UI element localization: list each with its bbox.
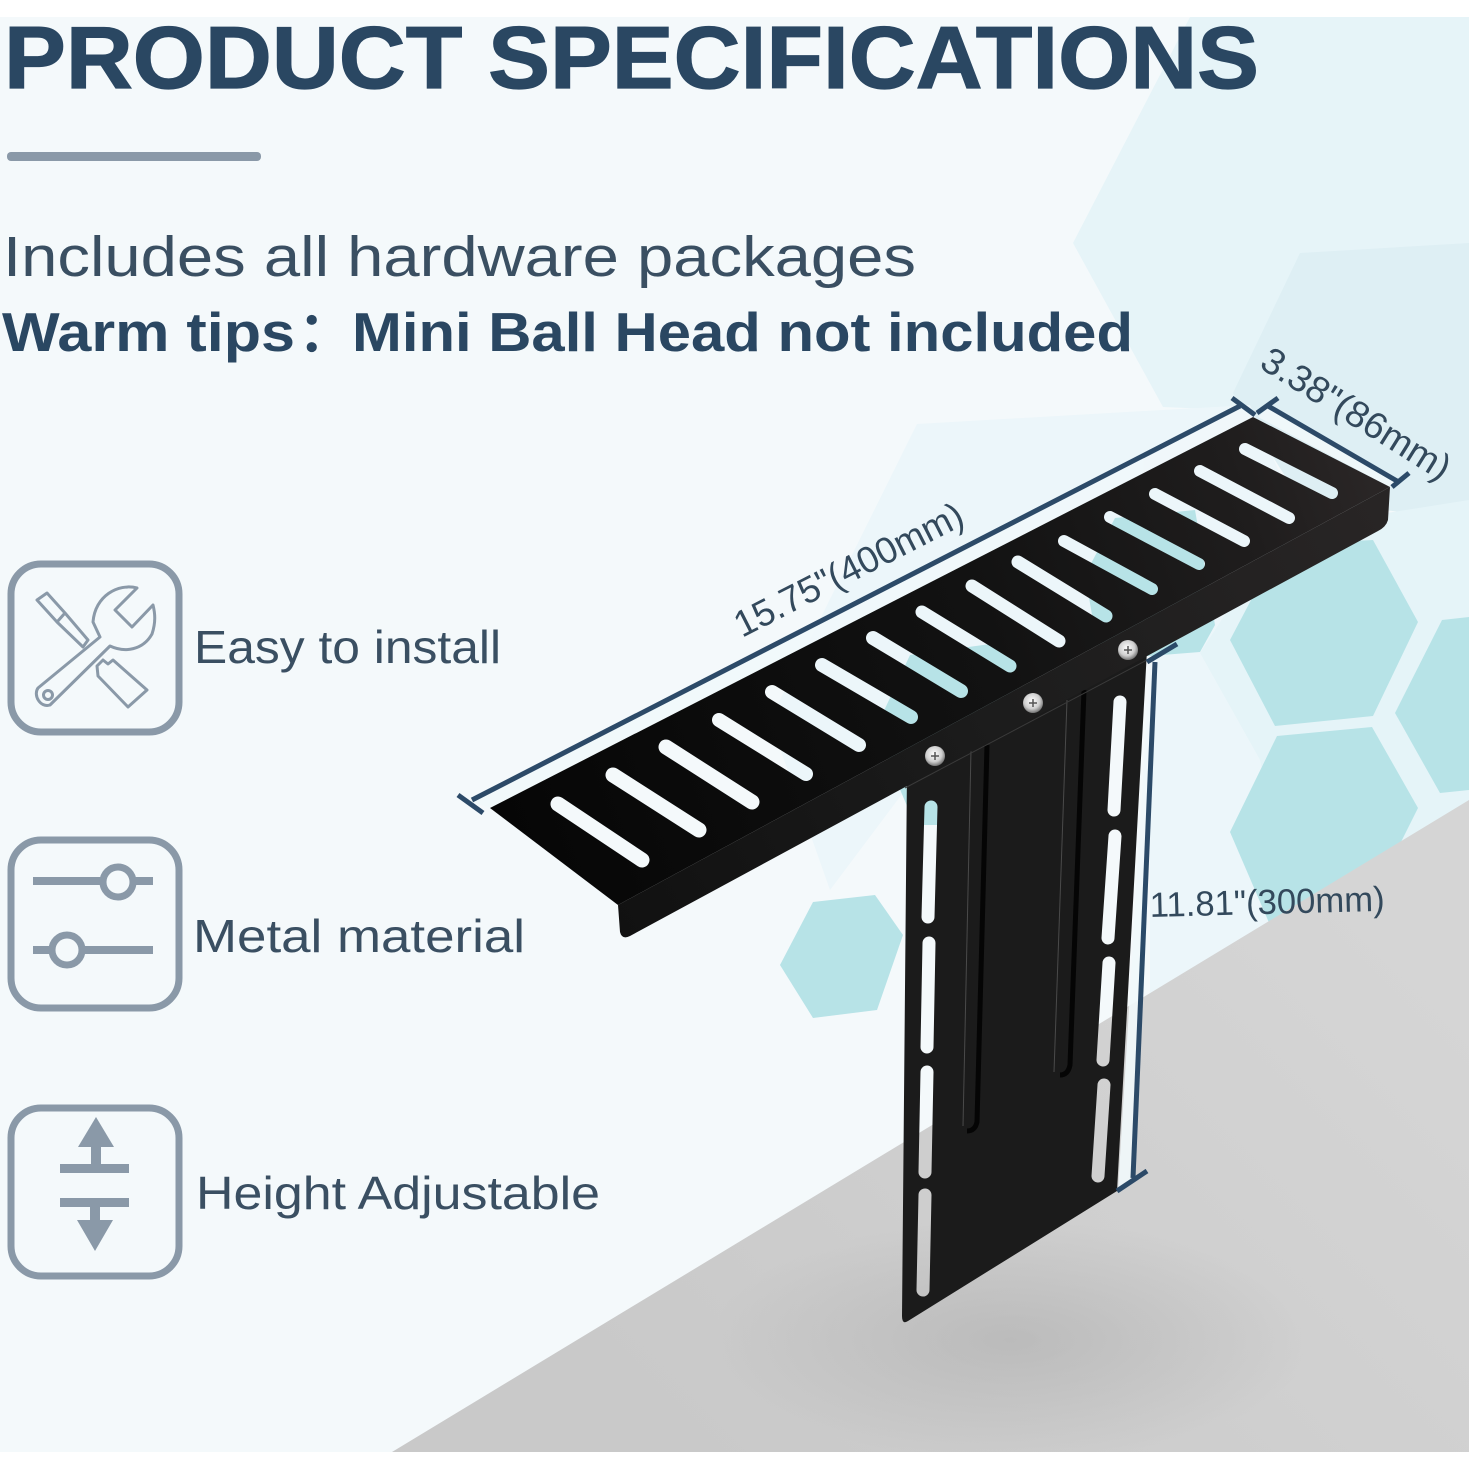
label: easy to install: Easy to install (194, 621, 501, 673)
label: 11.81 inch height: 11.81"(300mm) (1149, 880, 1385, 925)
label: 15.75 inch length: 15.75"(400mm) (727, 494, 970, 645)
icon: up and down arrows (11, 1108, 179, 1276)
plate top edge line (905, 660, 1147, 788)
subtitle: hardware: Includes all hardware packages (3, 225, 916, 289)
warm tips note: Warm tips (2, 301, 295, 363)
product: T-shaped bracket (472, 408, 1397, 1322)
feature: metal material (11, 840, 525, 1008)
shelf front fold (618, 487, 1390, 937)
screws (925, 640, 1138, 766)
warm tips note (2, 301, 1133, 363)
label: 3.38 inch width: 3.38"(86mm) (1254, 339, 1459, 488)
shelf top with slots (490, 417, 1390, 905)
dimension: shelf length (458, 398, 1255, 813)
warm tips note: Mini Ball Head not included (352, 301, 1133, 363)
icon: screwdriver and wrench (11, 564, 179, 732)
icon: sliders (11, 840, 179, 1008)
feature: easy to install (11, 564, 501, 732)
grey tabletop surface (392, 800, 1469, 1460)
dimension: plate height (1117, 644, 1177, 1191)
label: metal material: Metal material (193, 910, 525, 962)
warm tips note: ： (298, 301, 353, 363)
plate grooves (963, 690, 1084, 1131)
vertical plate (902, 650, 1147, 1322)
title: PRODUCT SPECIFICATIONS (4, 8, 1259, 107)
label: height adjustable: Height Adjustable (196, 1167, 600, 1219)
title underline (7, 152, 261, 161)
light halo strips beside the dimension lines (472, 408, 1397, 1190)
dimension: shelf width (1257, 398, 1409, 487)
background hexagon pattern (770, 17, 1469, 1018)
feature: height adjustable (11, 1108, 600, 1276)
